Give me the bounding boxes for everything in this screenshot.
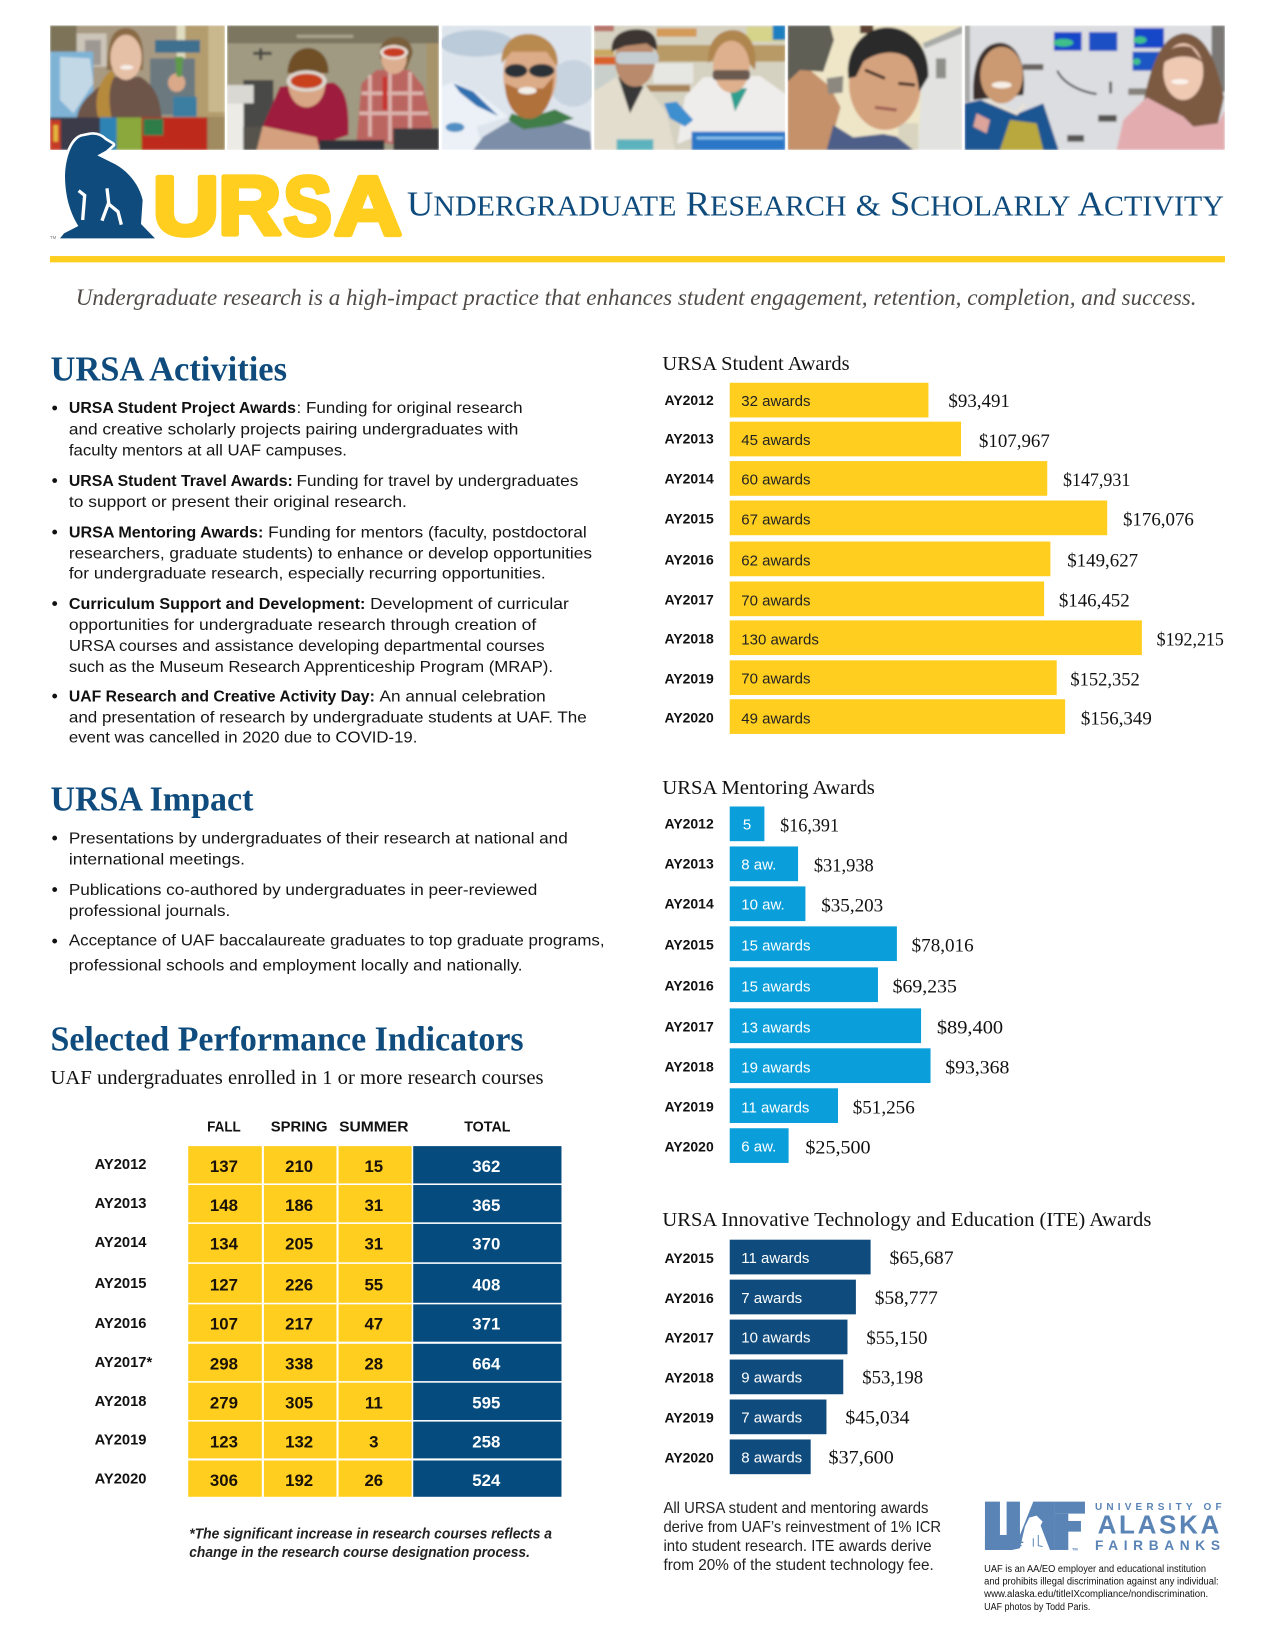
bar AY2019: AY2019 (665, 670, 714, 686)
table header: SPRING (271, 1119, 328, 1135)
chart heading: URSA Mentoring Awards (662, 777, 875, 799)
bar AY2013: 45 awards (741, 432, 811, 449)
table row AY2014: 134 (210, 1235, 239, 1254)
bar AY2013: $107,967 (979, 431, 1050, 452)
table row AY2015: 408 (472, 1276, 500, 1295)
list item: research and creative activity day (52, 688, 587, 746)
bar AY2020 (665, 1128, 871, 1163)
table header (207, 1119, 510, 1135)
bar AY2019: AY2019 (665, 1410, 714, 1426)
bar AY2018 (665, 1360, 923, 1394)
wordmark: URSA: S (283, 159, 332, 252)
table row AY2018: AY2018 (95, 1394, 146, 1410)
table row AY2012: 210 (285, 1157, 313, 1176)
bar AY2018: $93,368 (945, 1058, 1009, 1079)
bar AY2019: 11 awards (741, 1099, 809, 1116)
bar AY2014 (665, 461, 1130, 496)
table row AY2012: 15 (364, 1157, 383, 1176)
logo: University of Alaska Fairbanks: FAIRBANKS (1095, 1538, 1220, 1553)
bar AY2013: AY2013 (665, 431, 714, 447)
bar AY2013: 8 aw. (741, 857, 776, 874)
table row AY2016: 47 (364, 1315, 383, 1334)
table row AY2014: 205 (285, 1235, 313, 1254)
bar AY2015: 67 awards (741, 512, 811, 529)
chart: URSA Mentoring Awards (662, 777, 1009, 1163)
list item: student project awards: URSA Student Project Awards (69, 400, 296, 417)
table row AY2017: AY2017* (95, 1355, 152, 1371)
bar AY2018: AY2018 (665, 1370, 714, 1386)
bar AY2015: AY2015 (665, 511, 714, 527)
bar AY2016: 62 awards (741, 553, 811, 570)
photo: students in goggles (227, 25, 439, 150)
bar AY2016: $149,627 (1067, 551, 1138, 572)
bar AY2016: 15 awards (741, 979, 811, 996)
bar AY2014: $147,931 (1063, 470, 1130, 491)
bar AY2016: 7 awards (741, 1290, 802, 1307)
table row AY2017: 664 (472, 1355, 501, 1374)
bar AY2017 (665, 1320, 927, 1354)
photo: student and faculty mentor (788, 25, 962, 150)
tagline: Undergraduate research is a high-impact practice that enhances student engagement, retention, completion, and success. (76, 285, 1197, 311)
bar AY2016: $69,235 (893, 977, 957, 998)
table row AY2020: 306 (210, 1471, 238, 1490)
bar AY2019: AY2019 (665, 1098, 714, 1114)
table row AY2016: AY2016 (95, 1316, 146, 1332)
bar AY2017: AY2017 (665, 1330, 714, 1346)
bar AY2019: $45,034 (845, 1408, 910, 1429)
bar AY2014: $35,203 (821, 896, 883, 917)
heading: URSA Activities: URSA Activities (50, 350, 287, 389)
bar AY2015 (665, 1240, 954, 1274)
bar AY2020 (665, 699, 1152, 734)
bar AY2014: AY2014 (665, 895, 714, 911)
table row AY2016: 371 (472, 1315, 500, 1334)
photo: bearded student with sunglasses (440, 25, 597, 150)
bar AY2019: $51,256 (853, 1098, 915, 1119)
table row AY2014: AY2014 (95, 1235, 147, 1251)
table row AY2020 (95, 1461, 561, 1497)
list item: curriculum support: Curriculum Support and Development: (69, 596, 365, 613)
list item: student travel awards: URSA Student Travel Awards: (69, 473, 293, 490)
table row AY2012: 362 (472, 1157, 500, 1176)
table row AY2019: 3 (369, 1432, 378, 1451)
bar AY2015: AY2015 (665, 1250, 714, 1266)
panel: URSA Activities (50, 350, 592, 746)
funding note (663, 1500, 941, 1574)
bar AY2016 (665, 542, 1138, 576)
table row AY2019 (95, 1422, 561, 1458)
bar AY2016: AY2016 (665, 977, 714, 993)
list item: research and creative activity day: event was cancelled in 2020 due to COVID-19. (69, 729, 417, 746)
bar AY2019: 70 awards (741, 670, 811, 687)
list item: student travel awards (52, 473, 578, 511)
nondiscrimination statement (983, 1564, 1219, 1613)
logo: University of Alaska Fairbanks: UNIVERSITY OF (1095, 1502, 1222, 1513)
footnote: change in the research course designation process. (189, 1545, 530, 1561)
chart: URSA ITE Awards (662, 1209, 1152, 1474)
list item: publications (52, 882, 537, 920)
bar AY2018: 130 awards (741, 632, 819, 649)
bar AY2016: AY2016 (665, 1290, 714, 1306)
bar AY2018: $53,198 (862, 1368, 923, 1389)
table row AY2016 (95, 1304, 561, 1342)
bar AY2018 (665, 1048, 1009, 1083)
table row AY2014: 370 (472, 1235, 500, 1254)
table row AY2020: 26 (364, 1471, 383, 1490)
table row AY2020: 192 (285, 1471, 313, 1490)
table row AY2019: 123 (210, 1432, 238, 1451)
photo: students at research poster (965, 25, 1225, 150)
table row AY2017: 28 (364, 1355, 383, 1374)
table row AY2014: 31 (364, 1235, 383, 1254)
wordmark: URSA: A (334, 159, 402, 252)
list item: student travel awards: to support or present their original research. (69, 494, 407, 511)
bar AY2019: $152,352 (1070, 670, 1140, 691)
footnote: *The significant increase in research courses reflects a (189, 1526, 552, 1542)
bar AY2019 (665, 660, 1140, 695)
bar AY2018 (665, 620, 1224, 655)
bar AY2017: AY2017 (665, 1019, 714, 1035)
table row AY2013 (95, 1185, 561, 1222)
chart heading: URSA Student Awards (662, 353, 850, 375)
list item: student project awards: and creative scholarly projects pairing undergraduates with (69, 421, 518, 438)
bar AY2016: $58,777 (875, 1288, 938, 1309)
table row AY2014 (95, 1224, 561, 1262)
bar AY2015: 11 awards (741, 1250, 809, 1267)
bar AY2013 (665, 846, 874, 881)
bar AY2015: $78,016 (912, 936, 974, 957)
panel: URSA Impact (50, 780, 605, 975)
list item: mentoring awards (52, 524, 592, 582)
bar AY2012: AY2012 (665, 816, 714, 832)
list item: presentations (52, 830, 568, 868)
nondiscrimination statement: UAF photos by Todd Paris. (984, 1602, 1090, 1613)
bar AY2019: 7 awards (741, 1410, 802, 1427)
table row AY2013: 365 (472, 1196, 500, 1215)
funding note: All URSA student and mentoring awards (663, 1500, 929, 1517)
list item: research and creative activity day: UAF Research and Creative Activity Day: (69, 688, 375, 705)
table row AY2018: 595 (472, 1393, 500, 1412)
list item: research and creative activity day: and presentation of research by undergraduate students at UAF. The (69, 709, 587, 726)
list item: student project awards: : Funding for original research (297, 400, 523, 417)
bar AY2020: 6 aw. (741, 1138, 776, 1155)
bar AY2017: $89,400 (937, 1018, 1003, 1039)
bar AY2018: AY2018 (665, 1058, 714, 1074)
chart heading: URSA Innovative Technology and Education (ITE) Awards (662, 1209, 1152, 1231)
bar AY2012: AY2012 (665, 392, 714, 408)
list item: curriculum support (52, 596, 569, 676)
photo strip (50, 25, 1225, 150)
table row AY2016: 107 (210, 1315, 238, 1334)
bar AY2017: $146,452 (1059, 591, 1130, 612)
bar AY2013: AY2013 (665, 856, 714, 872)
bar AY2012: 5 (743, 817, 751, 834)
table row AY2018: 305 (285, 1393, 313, 1412)
table row AY2013: AY2013 (95, 1196, 146, 1212)
table row AY2017 (95, 1344, 561, 1381)
list item: publications: Publications co-authored by undergraduates in peer-reviewed (69, 882, 537, 899)
table row AY2012 (95, 1146, 561, 1183)
bar AY2015 (665, 926, 974, 961)
bar AY2012 (665, 383, 1010, 417)
heading: Selected Performance Indicators: Selected Performance Indicators (50, 1019, 524, 1058)
list item: student project awards: faculty mentors at all UAF campuses. (69, 442, 347, 459)
table header: FALL (207, 1119, 241, 1135)
list item: curriculum support: Development of curricular (370, 596, 569, 613)
photo: student artist with paintings (50, 25, 225, 150)
title: UNDERGRADUATE RESEARCH & SCHOLARLY ACTIVITY (407, 185, 1224, 224)
table row AY2019: 258 (472, 1432, 500, 1451)
bar AY2016 (665, 967, 957, 1002)
list item: research and creative activity day: An annual celebration (380, 688, 546, 705)
bar AY2018: $192,215 (1157, 630, 1224, 651)
nondiscrimination statement: www.alaska.edu/titleIXcompliance/nondiscrimination. (983, 1589, 1208, 1600)
table row AY2012: AY2012 (95, 1157, 146, 1173)
bar AY2015: AY2015 (665, 936, 714, 952)
list item: curriculum support: such as the Museum Research Apprenticeship Program (MRAP). (69, 659, 553, 676)
bar AY2020: 49 awards (741, 710, 811, 727)
list item: mentoring awards: URSA Mentoring Awards: (69, 524, 263, 541)
list item: curriculum support: URSA courses and assistance developing departmental courses (69, 638, 545, 655)
bar AY2014: AY2014 (665, 471, 714, 487)
bar AY2014 (665, 886, 883, 921)
list item: presentations: Presentations by undergraduates of their research at national and (69, 830, 568, 847)
table row AY2015: AY2015 (95, 1276, 146, 1292)
list item: mentoring awards: for undergraduate research, especially recurring opportunities. (69, 565, 546, 582)
bar AY2014: 10 aw. (741, 897, 785, 914)
bar AY2020: AY2020 (665, 709, 714, 725)
bar AY2012: $93,491 (948, 391, 1010, 412)
bar AY2016: AY2016 (665, 552, 714, 568)
table row AY2018: 279 (210, 1393, 238, 1412)
bar AY2018: AY2018 (665, 631, 714, 647)
table row AY2015 (95, 1264, 561, 1303)
list item: graduate acceptance: Acceptance of UAF baccalaureate graduates to top graduate programs, (69, 932, 605, 949)
bar AY2017 (665, 1008, 1003, 1043)
wordmark: URSA: R (218, 159, 281, 252)
bar AY2018: 19 awards (741, 1060, 811, 1077)
table row AY2017: 298 (210, 1355, 238, 1374)
icon: polar bear (50, 135, 155, 240)
bar AY2018: 9 awards (741, 1370, 802, 1387)
bar AY2017 (665, 581, 1130, 616)
logo: University of Alaska Fairbanks: TM (1072, 1546, 1078, 1551)
wordmark: URSA: U (153, 159, 219, 252)
bar AY2013 (665, 422, 1050, 456)
table row AY2018: 11 (365, 1393, 383, 1412)
logo: University of Alaska Fairbanks: ALASKA (1098, 1509, 1220, 1539)
bar AY2016 (665, 1280, 938, 1314)
list item: student travel awards: Funding for travel by undergraduates (297, 473, 578, 490)
bar AY2015 (665, 501, 1194, 535)
table row AY2017: 338 (285, 1355, 313, 1374)
logo: University of Alaska Fairbanks (985, 1502, 1222, 1553)
bar AY2017: 10 awards (741, 1330, 811, 1347)
bar AY2019 (665, 1088, 915, 1123)
table row AY2020: 524 (472, 1471, 501, 1490)
bar AY2020: $156,349 (1081, 708, 1152, 729)
bar AY2020: AY2020 (665, 1450, 714, 1466)
subheading: enrollment: UAF undergraduates enrolled in 1 or more research courses (50, 1067, 544, 1089)
table: enrollment by term (95, 1119, 561, 1497)
funding note: into student research. ITE awards derive (663, 1538, 932, 1555)
table header: TOTAL (464, 1119, 510, 1135)
table header: SUMMER (339, 1119, 409, 1135)
funding note: from 20% of the student technology fee. (663, 1557, 934, 1574)
list item: publications: professional journals. (69, 903, 230, 920)
list item: graduate acceptance (52, 932, 605, 975)
list item: presentations: international meetings. (69, 851, 245, 868)
bar AY2015: $65,687 (890, 1248, 954, 1269)
icon: polar bear: TM (50, 235, 57, 240)
bar AY2015: $176,076 (1123, 510, 1194, 531)
heading: URSA Impact: URSA Impact (50, 780, 254, 819)
bar AY2012: $16,391 (780, 816, 839, 837)
bar AY2020: 8 awards (741, 1450, 802, 1467)
table row AY2013: 186 (285, 1196, 313, 1215)
bar AY2017: 70 awards (741, 593, 811, 610)
table row AY2019: 132 (285, 1432, 313, 1451)
nondiscrimination statement: and prohibits illegal discrimination against any individual: (984, 1577, 1219, 1588)
table row AY2019: AY2019 (95, 1433, 146, 1449)
table row AY2018 (95, 1383, 561, 1420)
nondiscrimination statement: UAF is an AA/EO employer and educational institution (984, 1564, 1206, 1575)
table row AY2020: AY2020 (95, 1472, 146, 1488)
bar AY2020: AY2020 (665, 1138, 714, 1154)
bar AY2013: $31,938 (814, 856, 874, 877)
list item: student project awards (52, 400, 523, 459)
bar AY2012 (665, 806, 839, 841)
table row AY2015: 55 (364, 1276, 383, 1295)
bar AY2020: $37,600 (829, 1448, 894, 1469)
list item: mentoring awards: researchers, graduate students) to enhance or develop opportunities (69, 545, 592, 562)
bar AY2017: 13 awards (741, 1020, 811, 1037)
list item: graduate acceptance: professional schools and employment locally and nationally. (69, 958, 523, 975)
logo: URSA bear and wordmark (50, 135, 402, 252)
chart: URSA Student Awards (662, 353, 1224, 734)
bar AY2017: $55,150 (866, 1328, 927, 1349)
table row AY2013: 31 (364, 1196, 383, 1215)
table row AY2012: 137 (210, 1157, 238, 1176)
footnote (189, 1526, 552, 1561)
wordmark: URSA (153, 159, 402, 252)
bar AY2012: 32 awards (741, 393, 811, 410)
table row AY2015: 226 (285, 1276, 313, 1295)
table row AY2013: 148 (210, 1196, 238, 1215)
funding note: derive from UAF’s reinvestment of 1% ICR (663, 1519, 941, 1536)
divider rule (50, 256, 1225, 262)
table row AY2016: 217 (285, 1315, 313, 1334)
list item: mentoring awards: Funding for mentors (faculty, postdoctoral (268, 524, 587, 541)
bar AY2015: 15 awards (741, 938, 811, 955)
photo: lab researchers (594, 25, 785, 150)
bar AY2019 (665, 1400, 910, 1434)
bar AY2014: 60 awards (741, 472, 811, 489)
bar AY2020: $25,500 (805, 1137, 871, 1158)
list item: curriculum support: opportunities for undergraduate research through creation of (69, 617, 537, 634)
table row AY2015: 127 (210, 1276, 238, 1295)
bar AY2017: AY2017 (665, 592, 714, 608)
panel: Selected Performance Indicators (50, 1019, 561, 1561)
bar AY2020 (665, 1439, 894, 1474)
